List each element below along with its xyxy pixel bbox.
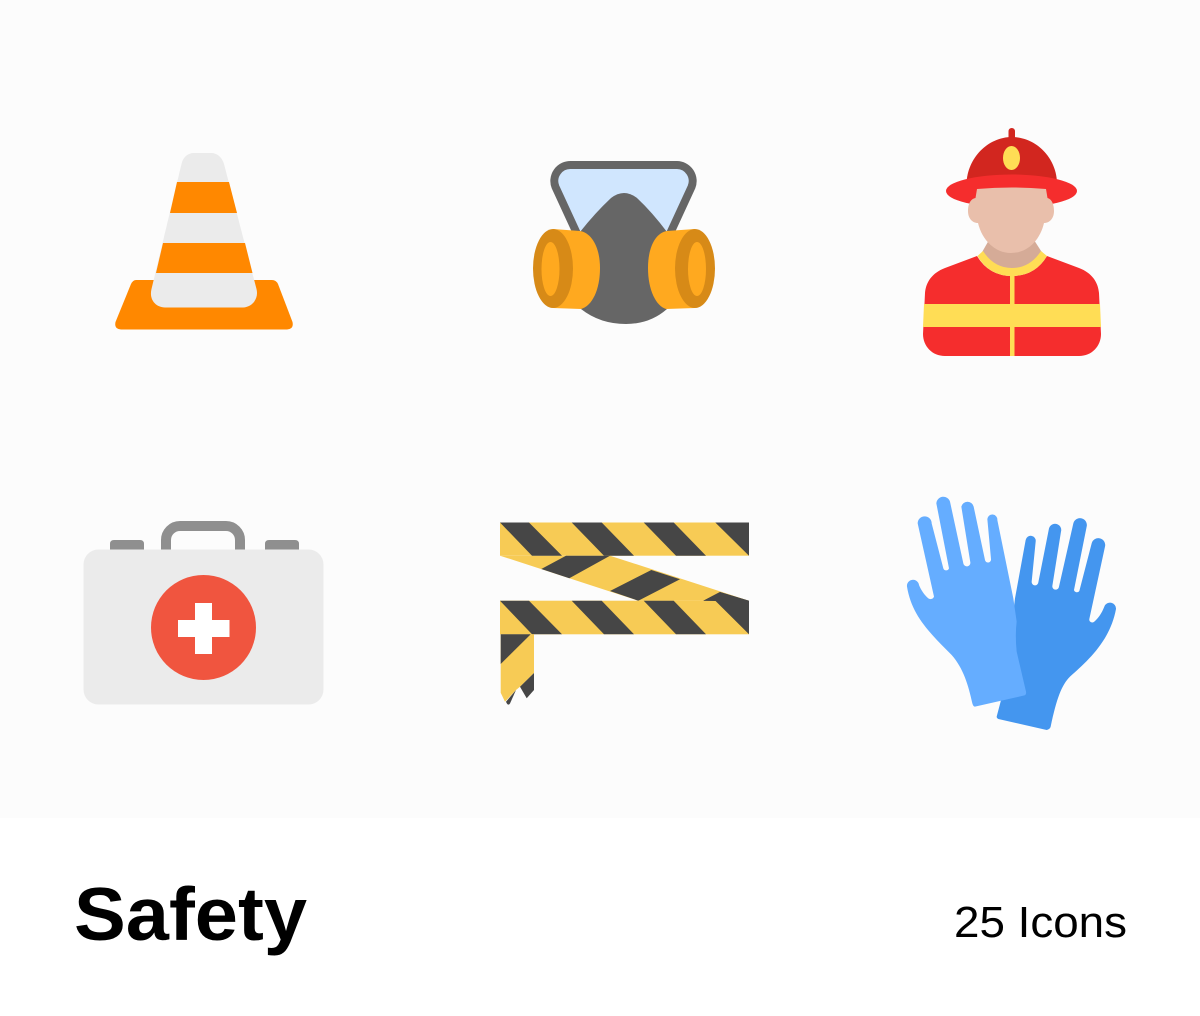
icon: first aid kit xyxy=(84,526,324,704)
title: Safety xyxy=(74,872,307,956)
icon: hazard tape xyxy=(500,522,749,705)
icon: traffic cone xyxy=(115,153,293,330)
icon: firefighter xyxy=(923,128,1101,356)
icon: respirator mask xyxy=(533,165,715,324)
icon: rubber gloves xyxy=(907,497,1116,730)
icon count label: 25 Icons xyxy=(954,898,1127,947)
